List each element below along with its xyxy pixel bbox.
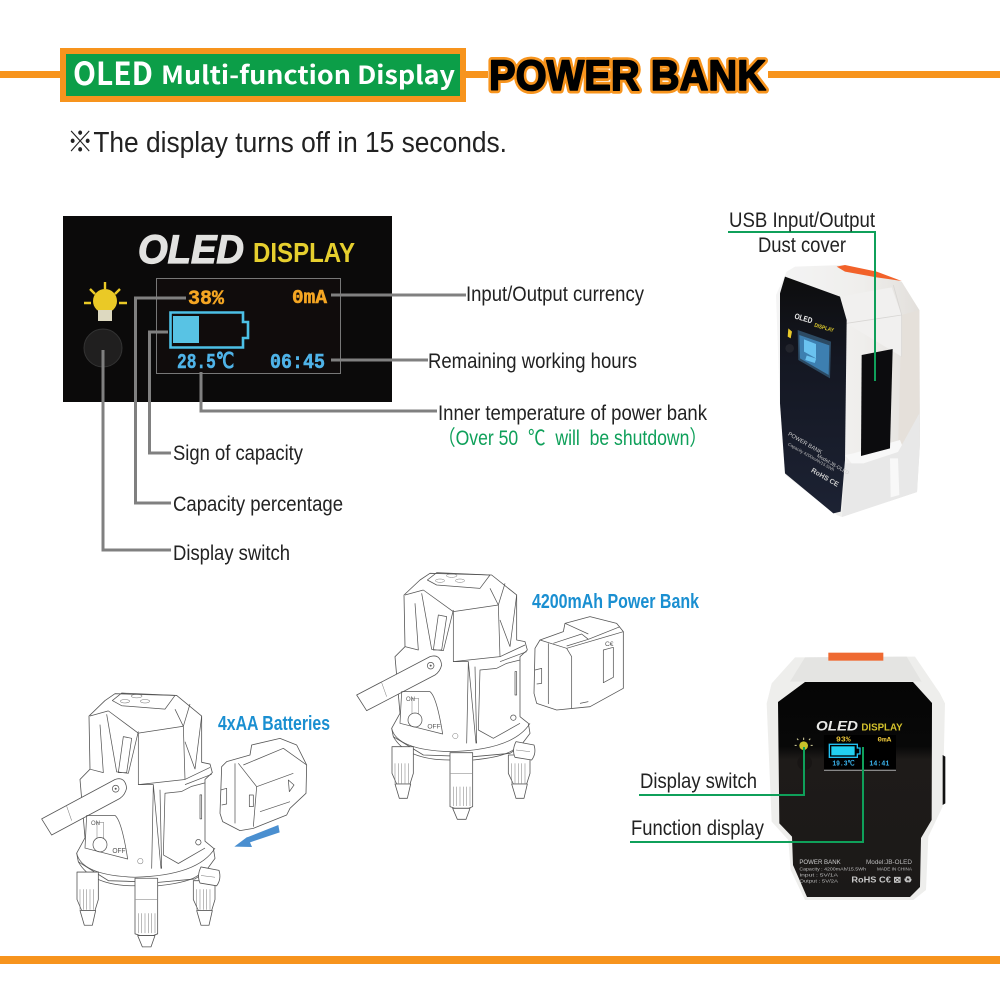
footer band: [0, 956, 1000, 964]
drawing: laser level with power bank: OFF: [427, 723, 441, 730]
heading: POWER BANK: POWER BANK: [489, 52, 766, 100]
drawing: laser level with power bank: [357, 573, 623, 819]
product photo: power bank angled view: DISPLAY: [813, 323, 835, 334]
heading: OLED Multi-function Display: [63, 49, 463, 99]
drawing: laser level with power bank: ON: [406, 697, 415, 703]
product photo: power bank front view: [767, 653, 945, 900]
callout line: dust cover: [728, 232, 875, 381]
current reading: 0mA: [292, 287, 328, 309]
heading: OLED Multi-function Display: OLED: [73, 49, 153, 95]
product photo: power bank front view: 93%: [836, 736, 852, 744]
product photo: power bank front view: Capacity : 4200mAh/15.5Wh: [799, 867, 867, 872]
label: inner temperature: Inner temperature of power bank: [438, 402, 707, 425]
label: function display: Function display: [631, 817, 764, 840]
product photo: power bank front view: 19.3℃: [832, 758, 855, 768]
panel: OLED display: [63, 216, 392, 402]
product photo: power bank front view: DISPLAY: [861, 722, 903, 733]
OLED logo: OLED: [138, 228, 244, 272]
label: 4xAA batteries: 4xAA Batteries: [218, 713, 330, 735]
product photo: power bank front view: Output : 5V/2A: [799, 878, 838, 883]
callout line: function display: [630, 747, 863, 842]
label: input/output currency: Input/Output currency: [466, 283, 644, 306]
header rule right: [768, 71, 1000, 78]
icon: light bulb: [84, 282, 127, 321]
time reading: 06:45: [270, 352, 325, 375]
product photo: power bank front view: Input : 5V/1A: [799, 872, 838, 877]
label: display switch: Display switch: [173, 542, 290, 565]
header rule left: [0, 71, 62, 78]
product photo: power bank front view: MADE IN CHINA: [877, 867, 912, 872]
temperature reading: 28.5℃: [177, 352, 234, 375]
label: dust cover: Dust cover: [758, 234, 846, 257]
capacity percent reading: 38%: [188, 288, 225, 311]
product photo: power bank angled view: [776, 265, 920, 517]
label: capacity percentage: Capacity percentage: [173, 493, 343, 516]
callout lines: display panel: [103, 295, 466, 550]
label: display switch (device): Display switch: [640, 770, 757, 793]
product photo: power bank angled view: Model:JB-OLED: [816, 453, 850, 477]
label: 4200mAh power bank: 4200mAh Power Bank: [532, 591, 700, 613]
OLED screen: [156, 278, 340, 375]
header rule middle: [464, 71, 488, 78]
drawing: laser level with AA battery pack: OFF: [112, 848, 126, 855]
label: sign of capacity: Sign of capacity: [173, 442, 303, 465]
battery icon: [170, 312, 248, 348]
product photo: power bank front view: OLED: [816, 717, 858, 733]
icon: display switch button: [84, 329, 122, 367]
DISPLAY logo: DISPLAY: [253, 237, 355, 268]
label: remaining working hours: Remaining working hours: [428, 350, 637, 373]
drawing: laser level with AA battery pack: [42, 693, 220, 947]
product photo: power bank front view: POWER BANK: [799, 859, 841, 866]
drawing: laser level with AA battery pack: ON: [91, 820, 100, 827]
battery pack: [220, 738, 307, 831]
heading: OLED Multi-function Display: Multi-function Display: [161, 56, 456, 92]
note: display off timing: ※The display turns off in 15 seconds.: [67, 127, 507, 159]
product photo: power bank angled view: Capacity 4200mAh/15.5Wh: [787, 442, 836, 473]
product photo: power bank front view: 14:41: [869, 760, 890, 768]
arrow: slide in: [234, 825, 280, 847]
label: USB input/output: USB Input/Output: [729, 209, 875, 232]
product photo: power bank angled view: POWER BANK: [787, 432, 823, 456]
callout line: display switch: [639, 747, 804, 795]
product photo: power bank angled view: OLED: [793, 312, 814, 325]
heading: POWER BANK: POWER BANK: [489, 52, 766, 100]
power bank module: C€: [605, 641, 614, 648]
label: shutdown warning: （Over 50 ℃ will be shutdown）: [438, 427, 707, 450]
product photo: power bank front view: RoHS C€ ⊠ ♻: [851, 874, 912, 884]
product photo: power bank angled view: RoHS CE: [810, 467, 840, 489]
power bank module: [534, 617, 623, 710]
product photo: power bank front view: 0mA: [877, 735, 891, 743]
product photo: power bank front view: Model:JB-OLED: [866, 859, 912, 866]
AA battery pack with insertion arrow: [220, 738, 307, 847]
